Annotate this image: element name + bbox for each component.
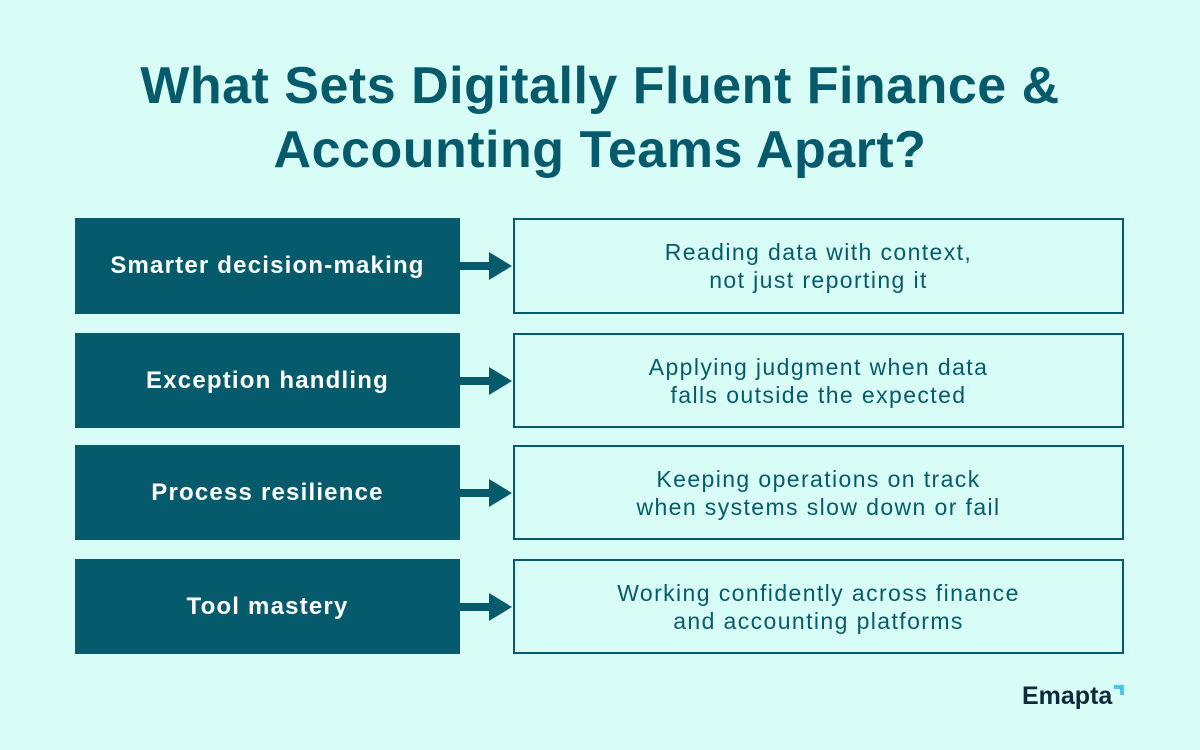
title — [140, 57, 1060, 179]
row 2 description — [513, 333, 1124, 428]
row 2 label — [75, 333, 460, 428]
row 3 label: Process resilience — [151, 478, 384, 506]
title: Accounting Teams Apart? — [274, 121, 926, 179]
row 4 description: Working confidently across finance — [617, 580, 1020, 606]
row 2 label: Exception handling — [146, 366, 389, 394]
row 4 label: Tool mastery — [186, 592, 348, 620]
logo: Emapta — [1022, 682, 1112, 710]
row 4 label — [75, 559, 460, 654]
row 1 label: Smarter decision-making — [110, 252, 425, 279]
row 3 description: Keeping operations on track — [656, 466, 981, 492]
arrow 3 — [460, 479, 512, 507]
row 1 label — [75, 218, 460, 314]
title: What Sets Digitally Fluent Finance & — [140, 57, 1060, 115]
arrow 4 — [460, 593, 512, 621]
row 1 description: not just reporting it — [709, 267, 928, 293]
arrow 2 — [460, 367, 512, 395]
row 2 description: falls outside the expected — [670, 382, 966, 408]
row 3 description — [513, 445, 1124, 540]
row 4 description: and accounting platforms — [673, 608, 964, 634]
row 3 label — [75, 445, 460, 540]
row 2 description: Applying judgment when data — [649, 354, 988, 380]
row 4 description — [513, 559, 1124, 654]
row 1 description — [513, 218, 1124, 314]
arrow 1 — [460, 252, 512, 280]
row 1 description: Reading data with context, — [665, 239, 972, 265]
row 3 description: when systems slow down or fail — [636, 494, 1001, 520]
